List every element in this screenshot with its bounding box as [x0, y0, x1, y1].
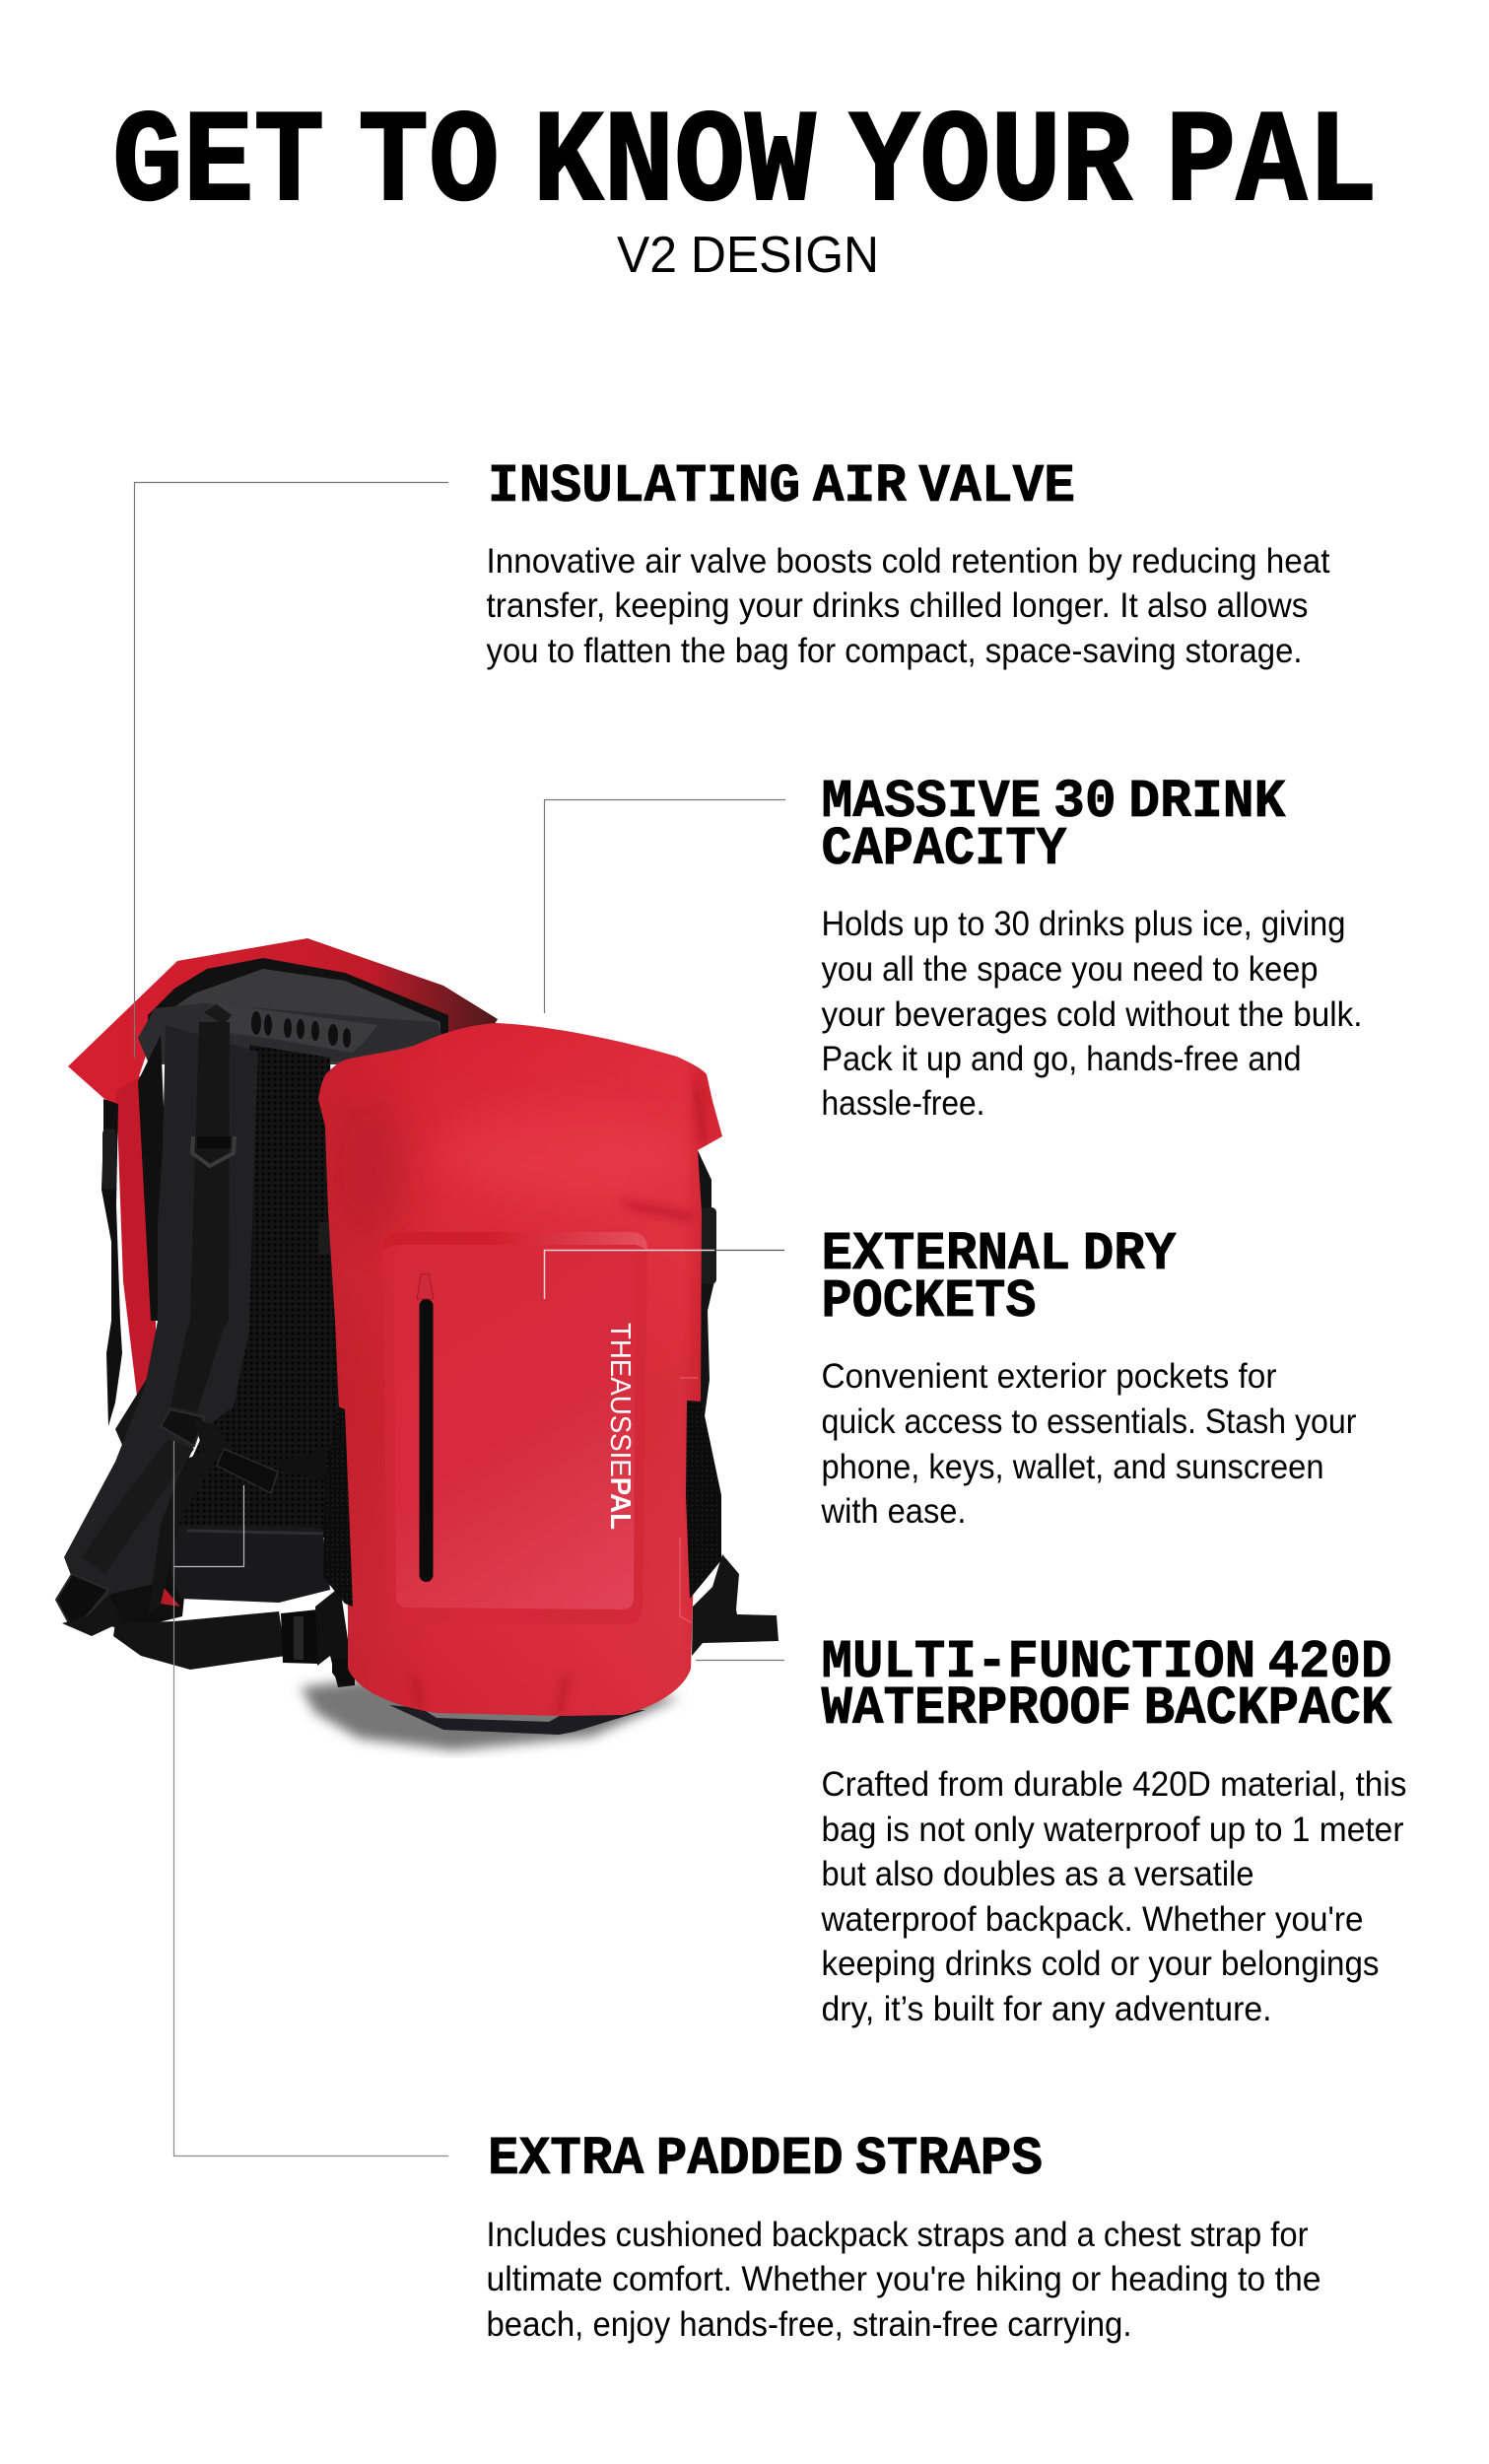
right strap [692, 1554, 778, 1656]
feature: external dry pockets: Convenient exterior pockets for [822, 1357, 1277, 1396]
chest strap [148, 1446, 217, 1616]
feature: extra padded straps: Includes cushioned backpack straps and a chest strap for [487, 2216, 1309, 2254]
feature: insulating air valve: INSULATING AIR VALVE [488, 455, 1075, 517]
feature: external dry pockets: phone, keys, wallet, and sunscreen [822, 1448, 1324, 1486]
lower strap underlay [89, 1449, 192, 1631]
callout line: strap branch [173, 1485, 244, 1567]
padded shoulder strap [56, 1022, 325, 1636]
feature: multi-function waterproof backpack: bag is not only waterproof up to 1 meter [822, 1811, 1404, 1849]
front pocket panel [382, 1232, 647, 1624]
feature: external dry pockets: EXTERNAL DRY [822, 1223, 1177, 1285]
lower strap buckle [56, 1574, 108, 1623]
feature: massive 30 drink capacity: Holds up to 30 drinks plus ice, giving [822, 905, 1346, 943]
front bag [318, 1023, 722, 1716]
title: GET TO KNOW YOUR PAL [112, 90, 1378, 239]
feature: insulating air valve: transfer, keeping your drinks chilled longer. It also allows [487, 586, 1309, 625]
feature: multi-function waterproof backpack: dry, it’s built for any adventure. [822, 1990, 1271, 2028]
base panel [170, 1525, 330, 1603]
callout line: backpack [696, 1660, 784, 1662]
back handle [204, 1004, 377, 1053]
feature: multi-function waterproof backpack: but also doubles as a versatile [822, 1855, 1253, 1893]
feature: multi-function waterproof backpack: keeping drinks cold or your belongings [822, 1945, 1380, 1983]
callout line: straps [173, 1441, 448, 2156]
feature: external dry pockets: quick access to essentials. Stash your [822, 1403, 1357, 1441]
back view bag [56, 938, 498, 1687]
callout line: pockets [544, 1250, 784, 1299]
feature: extra padded straps [487, 2128, 1320, 2344]
backpack illustration [56, 938, 778, 1750]
right side buckle strap [318, 1148, 716, 1416]
feature: extra padded straps: ultimate comfort. Whether you're hiking or heading to the [487, 2260, 1320, 2298]
feature: extra padded straps: EXTRA PADDED STRAPS [488, 2128, 1043, 2190]
callout line: capacity [544, 800, 785, 1013]
feature: multi-function waterproof backpack: waterproof backpack. Whether you're [821, 1900, 1364, 1939]
feature: insulating air valve [487, 455, 1330, 670]
brand wordmark: THEAUSSIEPAL [604, 1323, 636, 1530]
bag base [389, 1705, 645, 1735]
hip belt [113, 1587, 355, 1687]
feature: external dry pockets: with ease. [821, 1492, 966, 1531]
subtitle: V2 DESIGN [617, 227, 879, 284]
bag shading [330, 1084, 705, 1715]
mesh side pockets [323, 1401, 721, 1607]
feature: massive 30 drink capacity [822, 771, 1362, 1123]
feature: external dry pockets [821, 1223, 1357, 1531]
feature: insulating air valve: Innovative air valve boosts cold retention by reducing heat [487, 542, 1330, 581]
feature: massive 30 drink capacity: hassle-free. [822, 1084, 985, 1123]
feature: massive 30 drink capacity: you all the space you need to keep [822, 950, 1319, 989]
zip pull [417, 1273, 434, 1299]
feature: massive 30 drink capacity: your beverages cold without the bulk. [822, 995, 1362, 1034]
feature: multi-function waterproof backpack: MULTI-FUNCTION 420D [822, 1631, 1391, 1693]
feature: massive 30 drink capacity: CAPACITY [822, 818, 1066, 880]
feature: extra padded straps: beach, enjoy hands-free, strain-free carrying. [487, 2305, 1131, 2344]
feature: massive 30 drink capacity: Pack it up and go, hands-free and [822, 1040, 1301, 1078]
feature: multi-function waterproof backpack: Crafted from durable 420D material, this [822, 1765, 1407, 1804]
lower left corner strap [332, 1659, 355, 1685]
feature: external dry pockets: POCKETS [822, 1270, 1037, 1333]
feature: multi-function waterproof backpack: WATERPROOF BACKPACK [822, 1677, 1391, 1740]
ground shadow [301, 1676, 680, 1750]
zipper [420, 1299, 434, 1582]
feature: multi-function waterproof backpack [821, 1631, 1407, 2028]
callout line: air valve [134, 483, 448, 1058]
feature: massive 30 drink capacity: MASSIVE 30 DRINK [822, 771, 1285, 833]
feature: insulating air valve: you to flatten the bag for compact, space-saving storage. [487, 632, 1303, 670]
